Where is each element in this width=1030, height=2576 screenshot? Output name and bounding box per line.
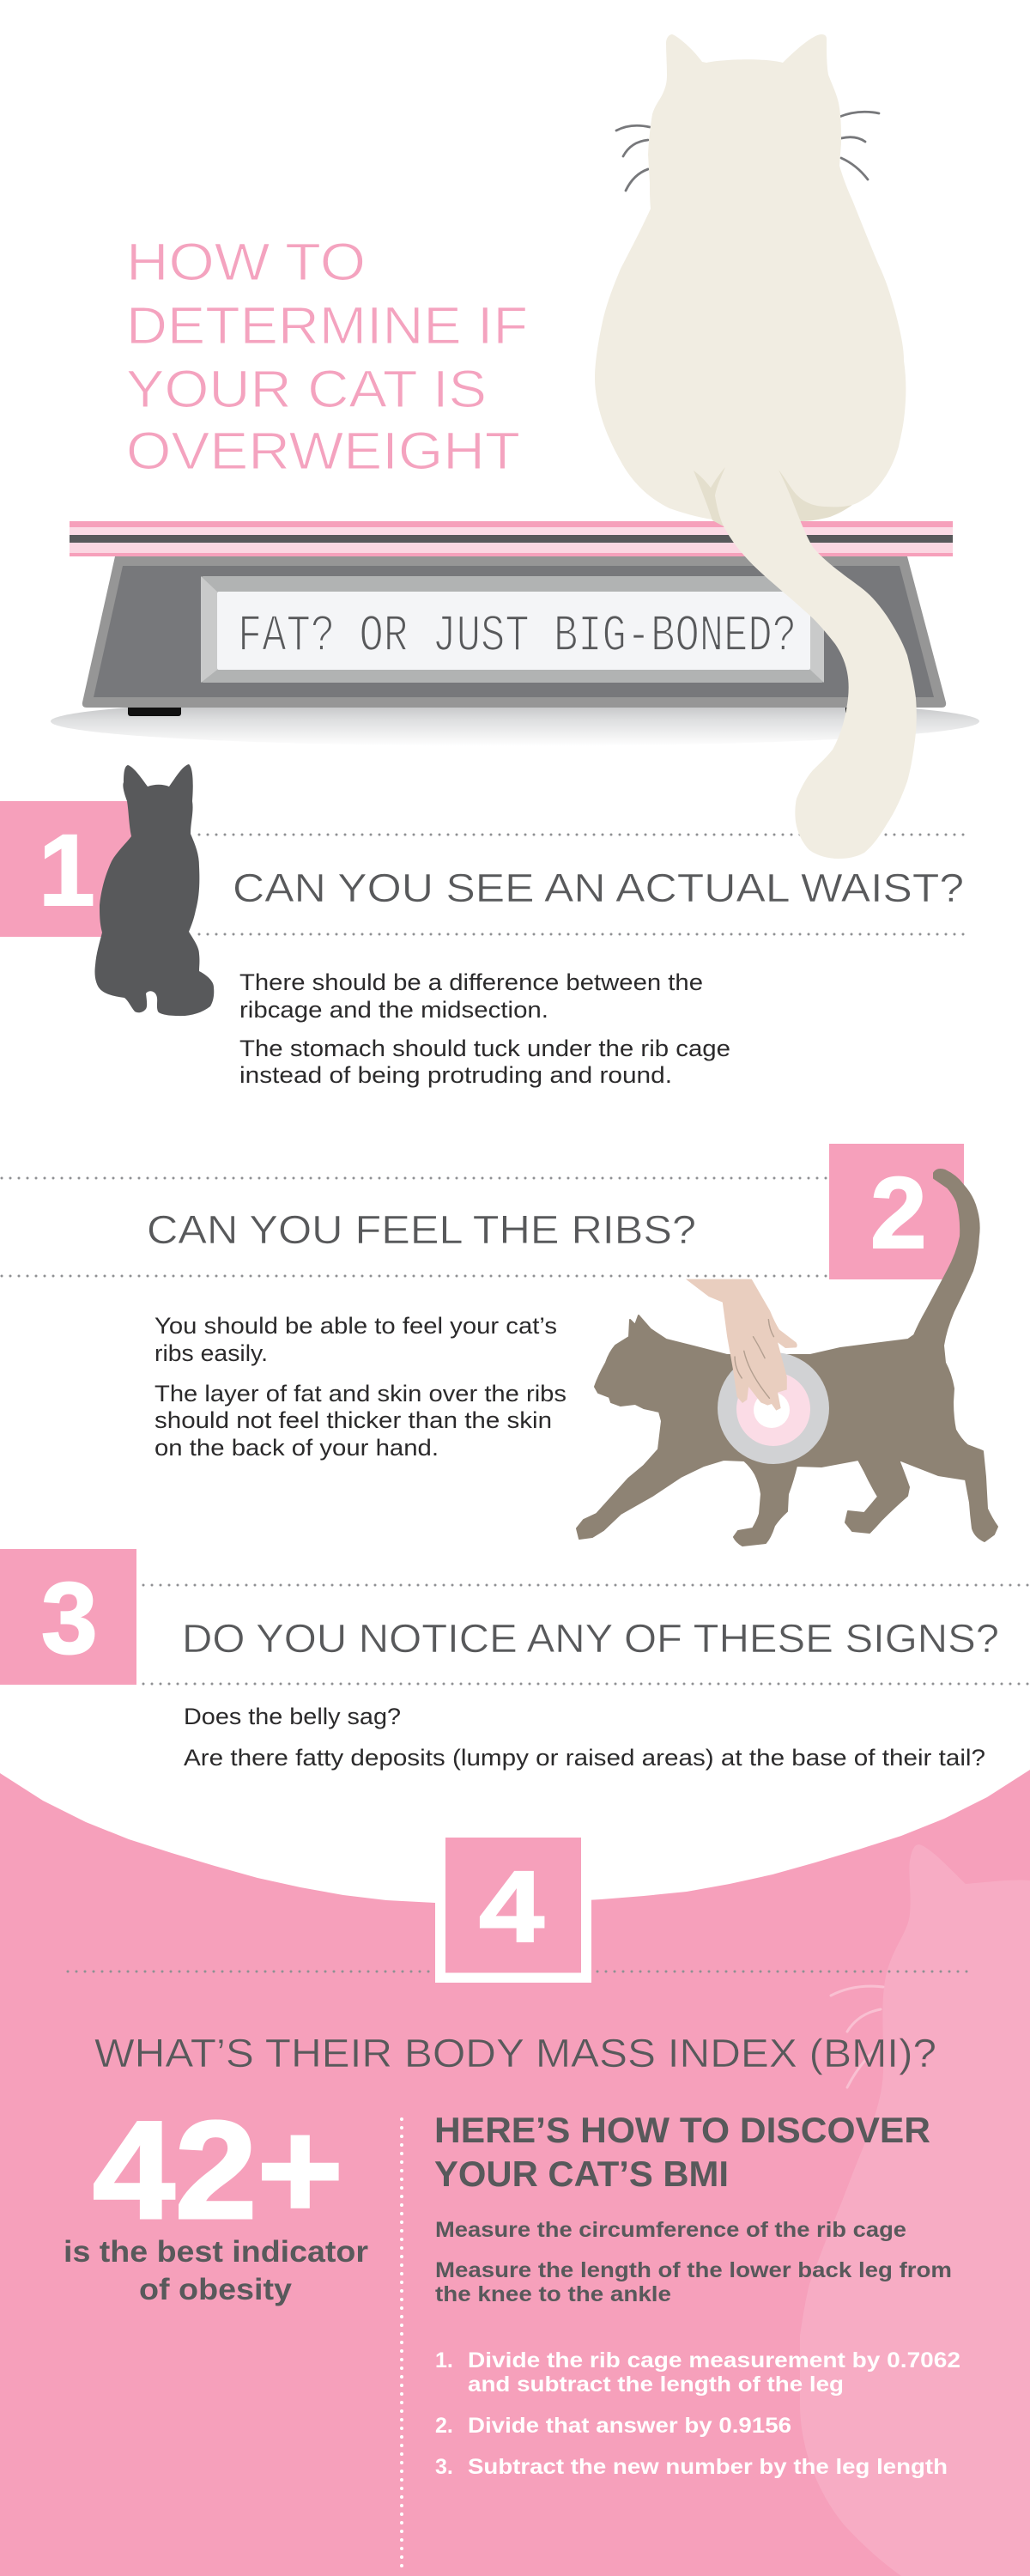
text block: measurements: Measure the circumference of the rib cage bbox=[435, 2218, 906, 2242]
illustration: faint cat silhouette bbox=[800, 1844, 1030, 2576]
scale platform bbox=[70, 521, 953, 556]
illustration: walking cat with hand bbox=[577, 1170, 997, 1546]
tail bbox=[715, 470, 917, 859]
walking cat silhouette bbox=[577, 1170, 997, 1546]
number badge 1: 1 bbox=[39, 814, 95, 927]
numbered list: steps: 2. bbox=[435, 2414, 453, 2438]
scale floor shadow bbox=[51, 696, 979, 746]
text block: ribs: on the back of your hand. bbox=[154, 1435, 439, 1461]
text block: waist: ribcage and the midsection. bbox=[239, 997, 548, 1023]
numbered list: steps: and subtract the length of the leg bbox=[468, 2372, 844, 2397]
text block: signs: Are there fatty deposits (lumpy or raised areas) at the base of their tail? bbox=[184, 1745, 985, 1771]
text block: ribs: should not feel thicker than the skin bbox=[154, 1407, 552, 1433]
stat: 42+: 42+ bbox=[93, 2093, 343, 2248]
illustration: cream cat from behind bbox=[595, 34, 917, 859]
number badge 3: 3 bbox=[41, 1562, 98, 1675]
haunch shadows bbox=[694, 467, 852, 526]
heading: ribs: CAN YOU FEEL THE RIBS? bbox=[147, 1207, 696, 1252]
title: YOUR CAT IS bbox=[126, 360, 487, 418]
text block: ribs: ribs easily. bbox=[154, 1340, 268, 1366]
text block: ribs: The layer of fat and skin over the ribs bbox=[154, 1381, 566, 1406]
stat caption: is the best indicator bbox=[64, 2235, 368, 2269]
cat body bbox=[595, 34, 906, 521]
numbered list: steps: 3. bbox=[435, 2455, 453, 2479]
numbered list: steps bbox=[435, 2348, 960, 2479]
icon: sitting grey cat bbox=[94, 764, 214, 1016]
scale bbox=[70, 521, 953, 716]
heading: how to discover: YOUR CAT’S BMI bbox=[434, 2154, 729, 2194]
section 3: signs bbox=[0, 1549, 1030, 1771]
title: OVERWEIGHT bbox=[126, 422, 520, 480]
rib target rings bbox=[718, 1352, 829, 1464]
numbered list: steps: 1. bbox=[435, 2348, 453, 2372]
scale display bbox=[201, 576, 824, 683]
number badge 2 bbox=[829, 1144, 964, 1279]
text block: measurements bbox=[435, 2218, 952, 2306]
section 2: ribs bbox=[2, 1144, 997, 1546]
title bbox=[126, 233, 528, 480]
heading: BMI: WHAT’S THEIR BODY MASS INDEX (BMI)? bbox=[94, 2031, 936, 2075]
scale display: FAT? OR JUST BIG-BONED? bbox=[238, 608, 797, 666]
title: DETERMINE IF bbox=[126, 296, 528, 355]
whiskers bbox=[616, 112, 879, 191]
heading: how to discover: HERE’S HOW TO DISCOVER bbox=[434, 2110, 930, 2150]
text block: signs: Does the belly sag? bbox=[184, 1704, 401, 1729]
text block: ribs: You should be able to feel your cat’s bbox=[154, 1313, 557, 1339]
section 4: BMI bbox=[64, 1838, 970, 2573]
heading: waist: CAN YOU SEE AN ACTUAL WAIST? bbox=[233, 866, 964, 910]
title: HOW TO bbox=[126, 233, 366, 291]
number badge 1 bbox=[0, 801, 136, 937]
panel: BMI background bbox=[0, 1770, 1030, 2576]
heading: signs: DO YOU NOTICE ANY OF THESE SIGNS? bbox=[182, 1616, 999, 1661]
text block: signs bbox=[184, 1704, 985, 1771]
number badge 4: 4 bbox=[479, 1850, 544, 1964]
hand bbox=[686, 1279, 797, 1411]
section 1: waist bbox=[0, 764, 966, 1088]
text block: measurements: Measure the length of the lower back leg from bbox=[435, 2258, 952, 2282]
number badge 2: 2 bbox=[870, 1157, 927, 1270]
numbered list: steps: Divide that answer by 0.9156 bbox=[468, 2414, 791, 2438]
number badge 4 bbox=[435, 1838, 591, 1983]
text block: waist: instead of being protruding and round. bbox=[239, 1062, 672, 1088]
text block: measurements: the knee to the ankle bbox=[435, 2282, 671, 2306]
heading: how to discover bbox=[434, 2110, 930, 2194]
text block: waist: The stomach should tuck under the rib cage bbox=[239, 1036, 730, 1061]
numbered list: steps: Subtract the new number by the leg length bbox=[468, 2455, 948, 2479]
stat caption: of obesity bbox=[139, 2273, 293, 2306]
text block: waist bbox=[239, 969, 730, 1088]
stat caption bbox=[64, 2235, 368, 2306]
text block: ribs bbox=[154, 1313, 566, 1461]
number badge 3 bbox=[0, 1549, 136, 1685]
numbered list: steps: Divide the rib cage measurement by 0.7062 bbox=[468, 2348, 960, 2372]
text block: waist: There should be a difference between the bbox=[239, 969, 703, 995]
